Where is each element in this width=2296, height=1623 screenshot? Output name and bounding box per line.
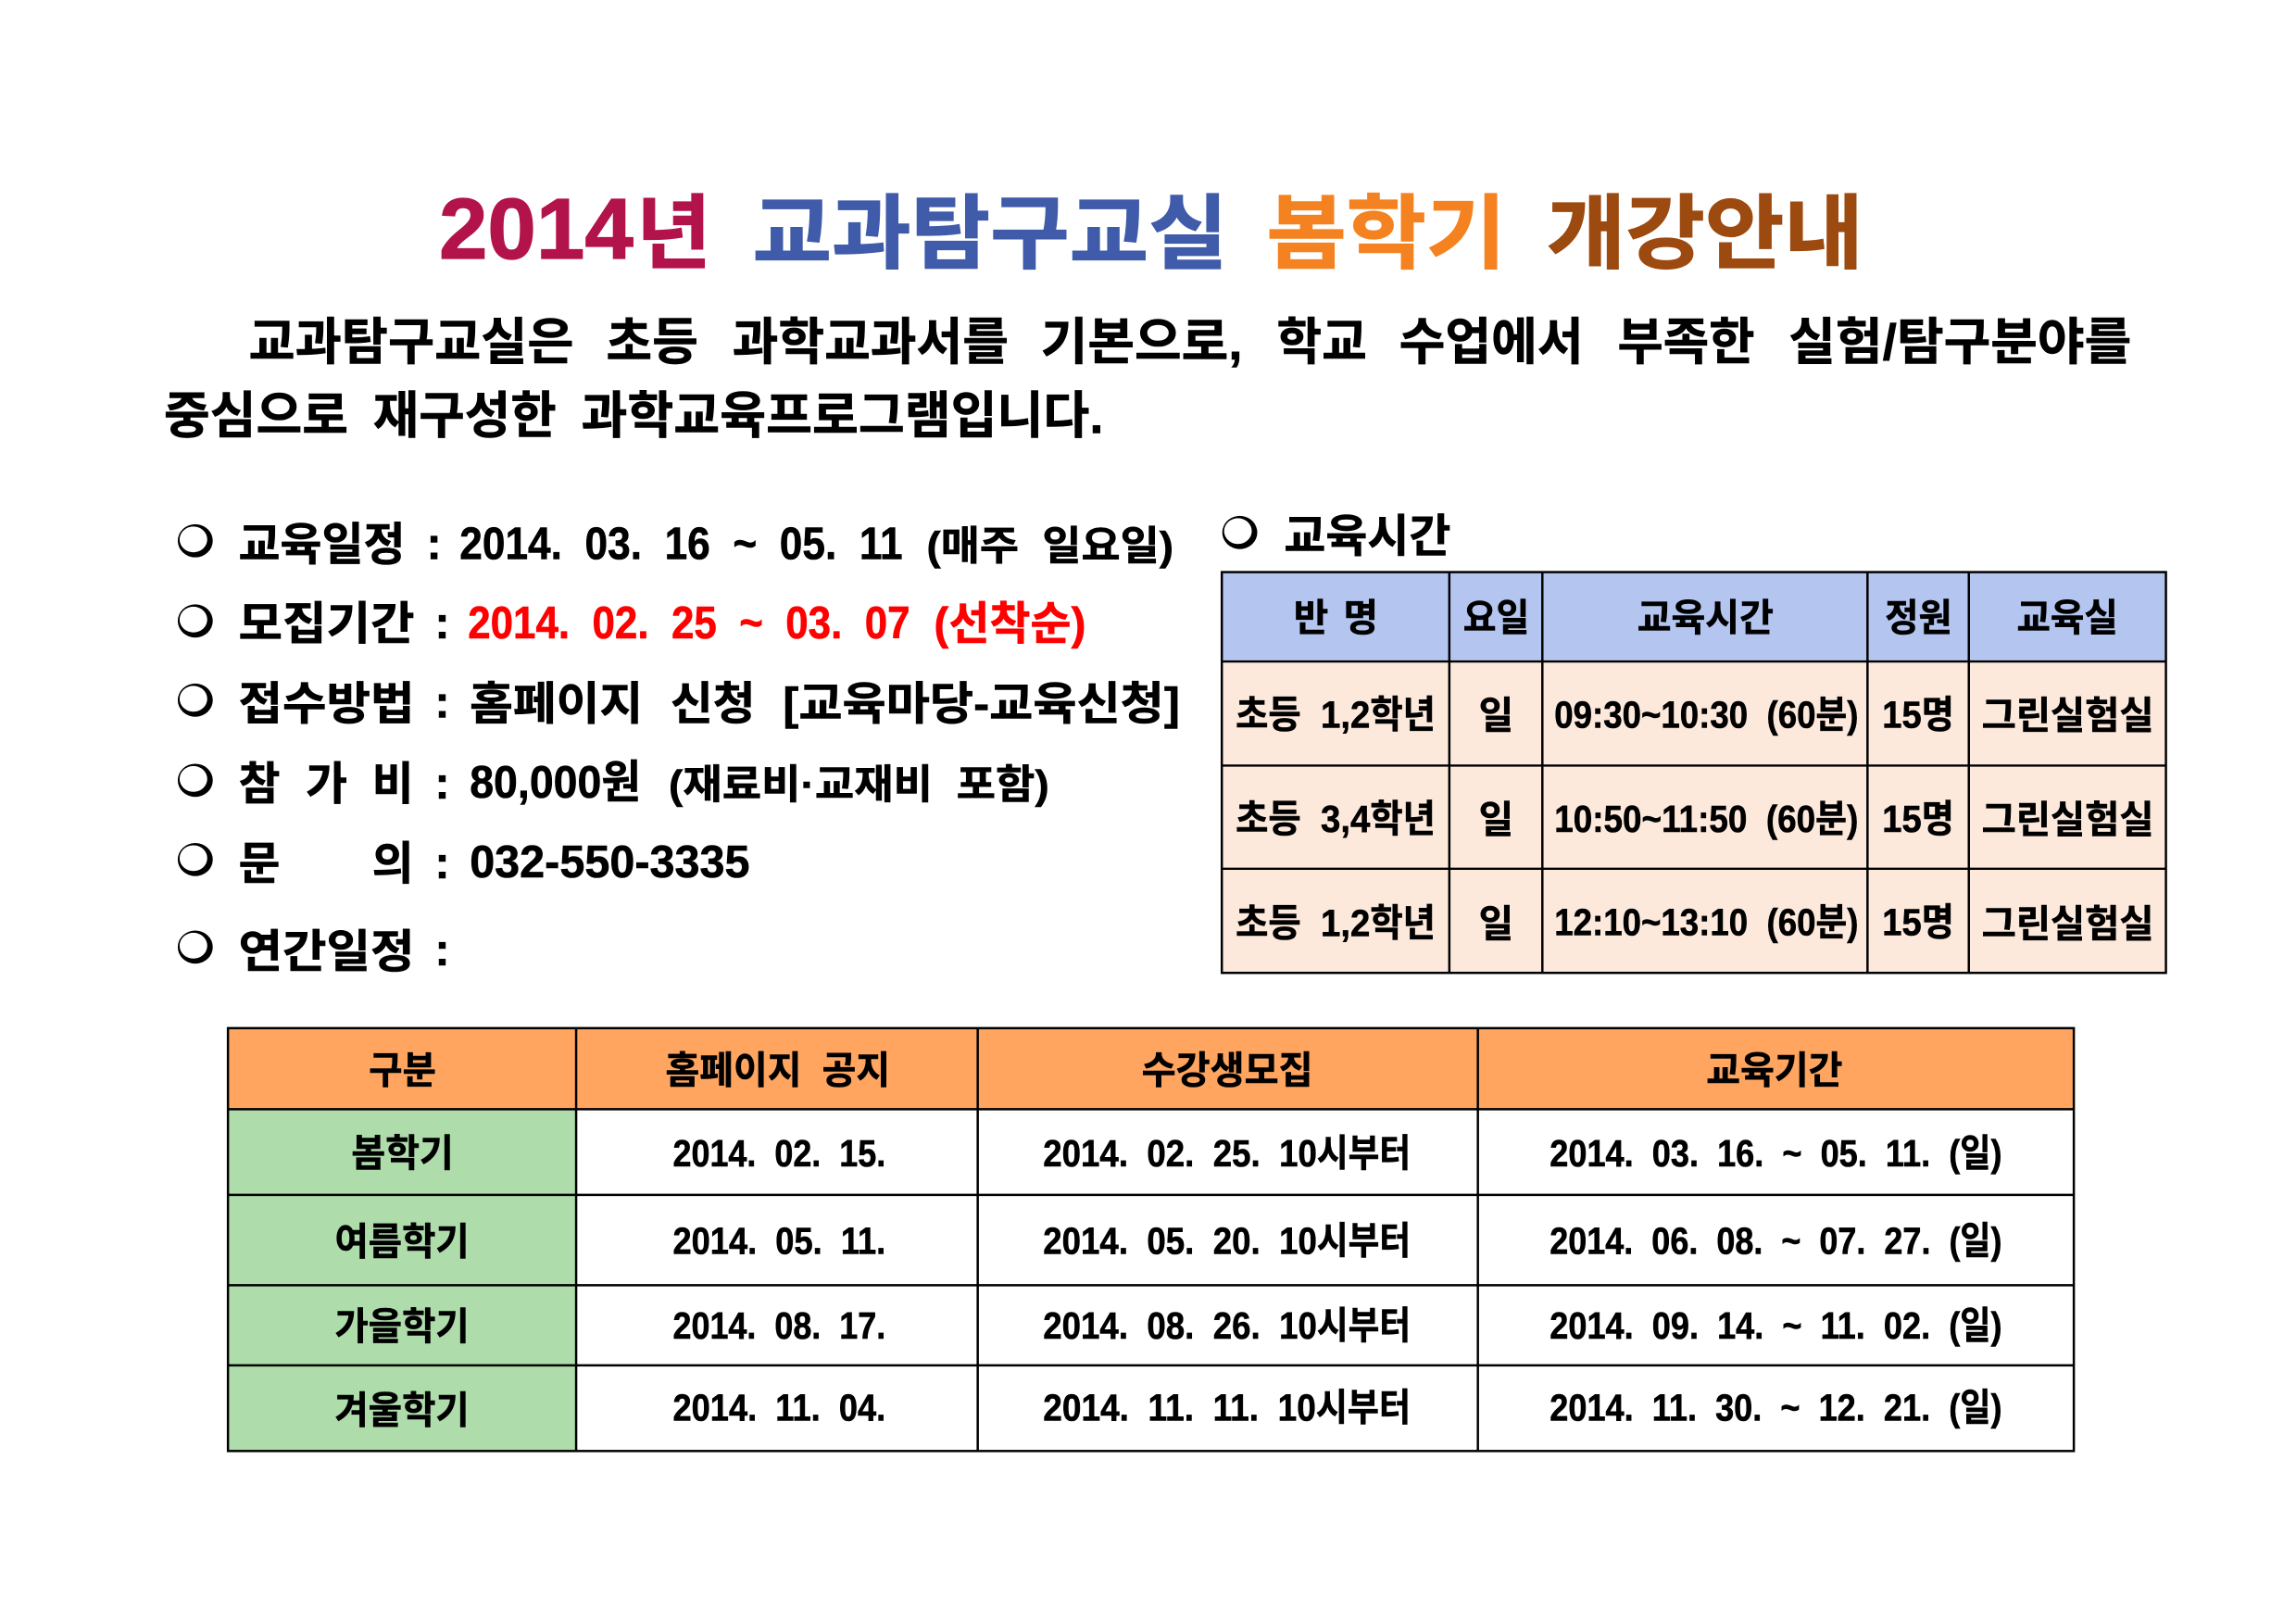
fee item: 참	[239, 760, 280, 810]
intro text block: 과학교육프로그램입니다.	[582, 386, 1103, 444]
application method item: 접수방법	[239, 680, 415, 730]
intro text block: 초등	[606, 313, 698, 371]
autumn row: 2014. 08. 26. 10시부터	[1043, 1304, 1411, 1347]
table row 1: 그린실험실	[1982, 695, 2154, 737]
schedule item: :	[426, 520, 442, 570]
table row 1	[1236, 694, 2154, 737]
recruitment period item: 모집기간	[239, 599, 415, 649]
table row 2: 그린실험실	[1982, 799, 2154, 841]
fee item: 80,000원	[470, 758, 641, 808]
schedule item: 2014. 03. 16 ~ 05. 11	[459, 520, 903, 570]
table row 3: 초등 1,2학년	[1236, 901, 1436, 944]
spring row: 2014. 02. 15.	[672, 1132, 885, 1175]
intro text block: 중심으로	[164, 386, 348, 444]
title	[439, 181, 1863, 279]
table header row: 교육시간	[1637, 597, 1774, 639]
contact item: :	[434, 838, 450, 888]
table row 1: 09:30~10:30 (60분)	[1554, 694, 1858, 736]
winter row: 2014. 11. 04.	[672, 1387, 885, 1429]
title: 개강안내	[1547, 188, 1863, 279]
fee item	[178, 758, 1049, 810]
schedule header row: 구분	[369, 1050, 436, 1092]
title: 봄학기	[1266, 188, 1506, 279]
application method item	[178, 678, 1180, 730]
schedule item	[178, 520, 1173, 571]
table row 1: 일	[1479, 695, 1513, 737]
spring row	[351, 1132, 2002, 1175]
contact item: 032-550-3335	[470, 837, 750, 887]
intro text block: 재구성한	[373, 386, 557, 444]
application method item: 홈페이지	[470, 680, 643, 730]
info list	[178, 520, 1180, 977]
intro text block: 교과탐구교실은	[249, 313, 574, 371]
table row 3: 12:10~13:10 (60분)	[1554, 900, 1858, 943]
table row 3: 일	[1479, 902, 1513, 945]
application method item: [교육마당-교육신청]	[783, 680, 1180, 730]
annual schedule table	[228, 1028, 2074, 1451]
table row 1: 15명	[1882, 694, 1954, 736]
schedule header row: 홈페이지 공지	[666, 1050, 890, 1092]
fee item: (재료비·교재비 포함)	[669, 762, 1049, 808]
recruitment period item	[178, 598, 1086, 649]
summer row	[335, 1220, 2002, 1264]
intro text block: 부족한	[1617, 313, 1755, 371]
summer row: 2014. 06. 08. ~ 07. 27. (일)	[1549, 1220, 2002, 1263]
title: 교과탐구교실	[753, 188, 1228, 279]
intro text block: 수업에서	[1399, 313, 1584, 371]
table header row	[1294, 597, 2118, 639]
intro text block: 학교	[1276, 313, 1367, 371]
intro text block: 실험/탐구분야를	[1788, 313, 2131, 371]
table row 1: 초등 1,2학년	[1236, 694, 1436, 736]
application method item: :	[434, 678, 450, 728]
table row 3: 15명	[1882, 900, 1954, 943]
summer row: 2014. 05. 11.	[672, 1220, 885, 1263]
recruitment period item: 2014. 02. 25 ~ 03. 07	[468, 598, 910, 648]
winter row: 2014. 11. 30. ~ 12. 21. (일)	[1549, 1387, 2002, 1429]
intro text block: 과학교과서를	[733, 313, 1009, 371]
title: 년	[636, 188, 711, 279]
schedule header row: 교육기간	[1706, 1050, 1842, 1092]
autumn row	[335, 1304, 2002, 1348]
contact item: 의	[372, 839, 414, 889]
table header row: 교육실	[2016, 597, 2118, 639]
intro text block: 기본으로,	[1041, 313, 1243, 371]
class times table	[1222, 572, 2166, 973]
table row 2: 초등 3,4학년	[1236, 798, 1436, 840]
application method item: 신청	[671, 680, 755, 730]
schedule item: (매주 일요일)	[926, 524, 1173, 570]
table row 2: 10:50~11:50 (60분)	[1554, 798, 1858, 840]
spring row: 봄학기	[351, 1132, 454, 1175]
heading: class times: 교육시간	[1284, 512, 1450, 562]
autumn row: 2014. 09. 14. ~ 11. 02. (일)	[1549, 1304, 2002, 1347]
contact item	[178, 837, 750, 889]
summer row: 2014. 05. 20. 10시부터	[1043, 1220, 1411, 1263]
schedule item: 교육일정	[239, 521, 406, 571]
title: 2014	[439, 181, 634, 277]
contact item: 문	[239, 839, 280, 889]
table header row: 정원	[1885, 597, 1952, 639]
table row 2: 15명	[1882, 798, 1954, 840]
table header row: 요일	[1463, 597, 1529, 639]
annual schedule item: 연간일정	[239, 927, 415, 977]
table row 3: 그린실험실	[1982, 902, 2154, 945]
spring row: 2014. 02. 25. 10시부터	[1043, 1132, 1411, 1175]
annual schedule item	[178, 925, 450, 977]
autumn row: 2014. 08. 17.	[672, 1304, 885, 1347]
winter row: 겨울학기	[335, 1390, 470, 1432]
autumn row: 가을학기	[335, 1305, 470, 1348]
table row 2	[1236, 798, 2154, 841]
winter row: 2014. 11. 11. 10시부터	[1043, 1387, 1411, 1429]
summer row: 여름학기	[335, 1221, 470, 1264]
fee item: 가	[306, 760, 347, 810]
table header row: 명	[1343, 597, 1378, 639]
schedule header row: 수강생모집	[1142, 1050, 1313, 1092]
fee item: 비	[372, 760, 414, 810]
fee item: :	[434, 759, 450, 809]
table row 3	[1236, 900, 2154, 945]
annual schedule item: :	[434, 925, 450, 975]
winter row	[335, 1387, 2002, 1432]
recruitment period item: (선착순)	[934, 599, 1086, 649]
table row 2: 일	[1479, 799, 1513, 841]
intro text block	[164, 313, 2131, 444]
table header row: 반	[1294, 597, 1328, 639]
schedule header row	[369, 1050, 1842, 1092]
recruitment period item: :	[434, 598, 450, 648]
spring row: 2014. 03. 16. ~ 05. 11. (일)	[1549, 1132, 2002, 1175]
